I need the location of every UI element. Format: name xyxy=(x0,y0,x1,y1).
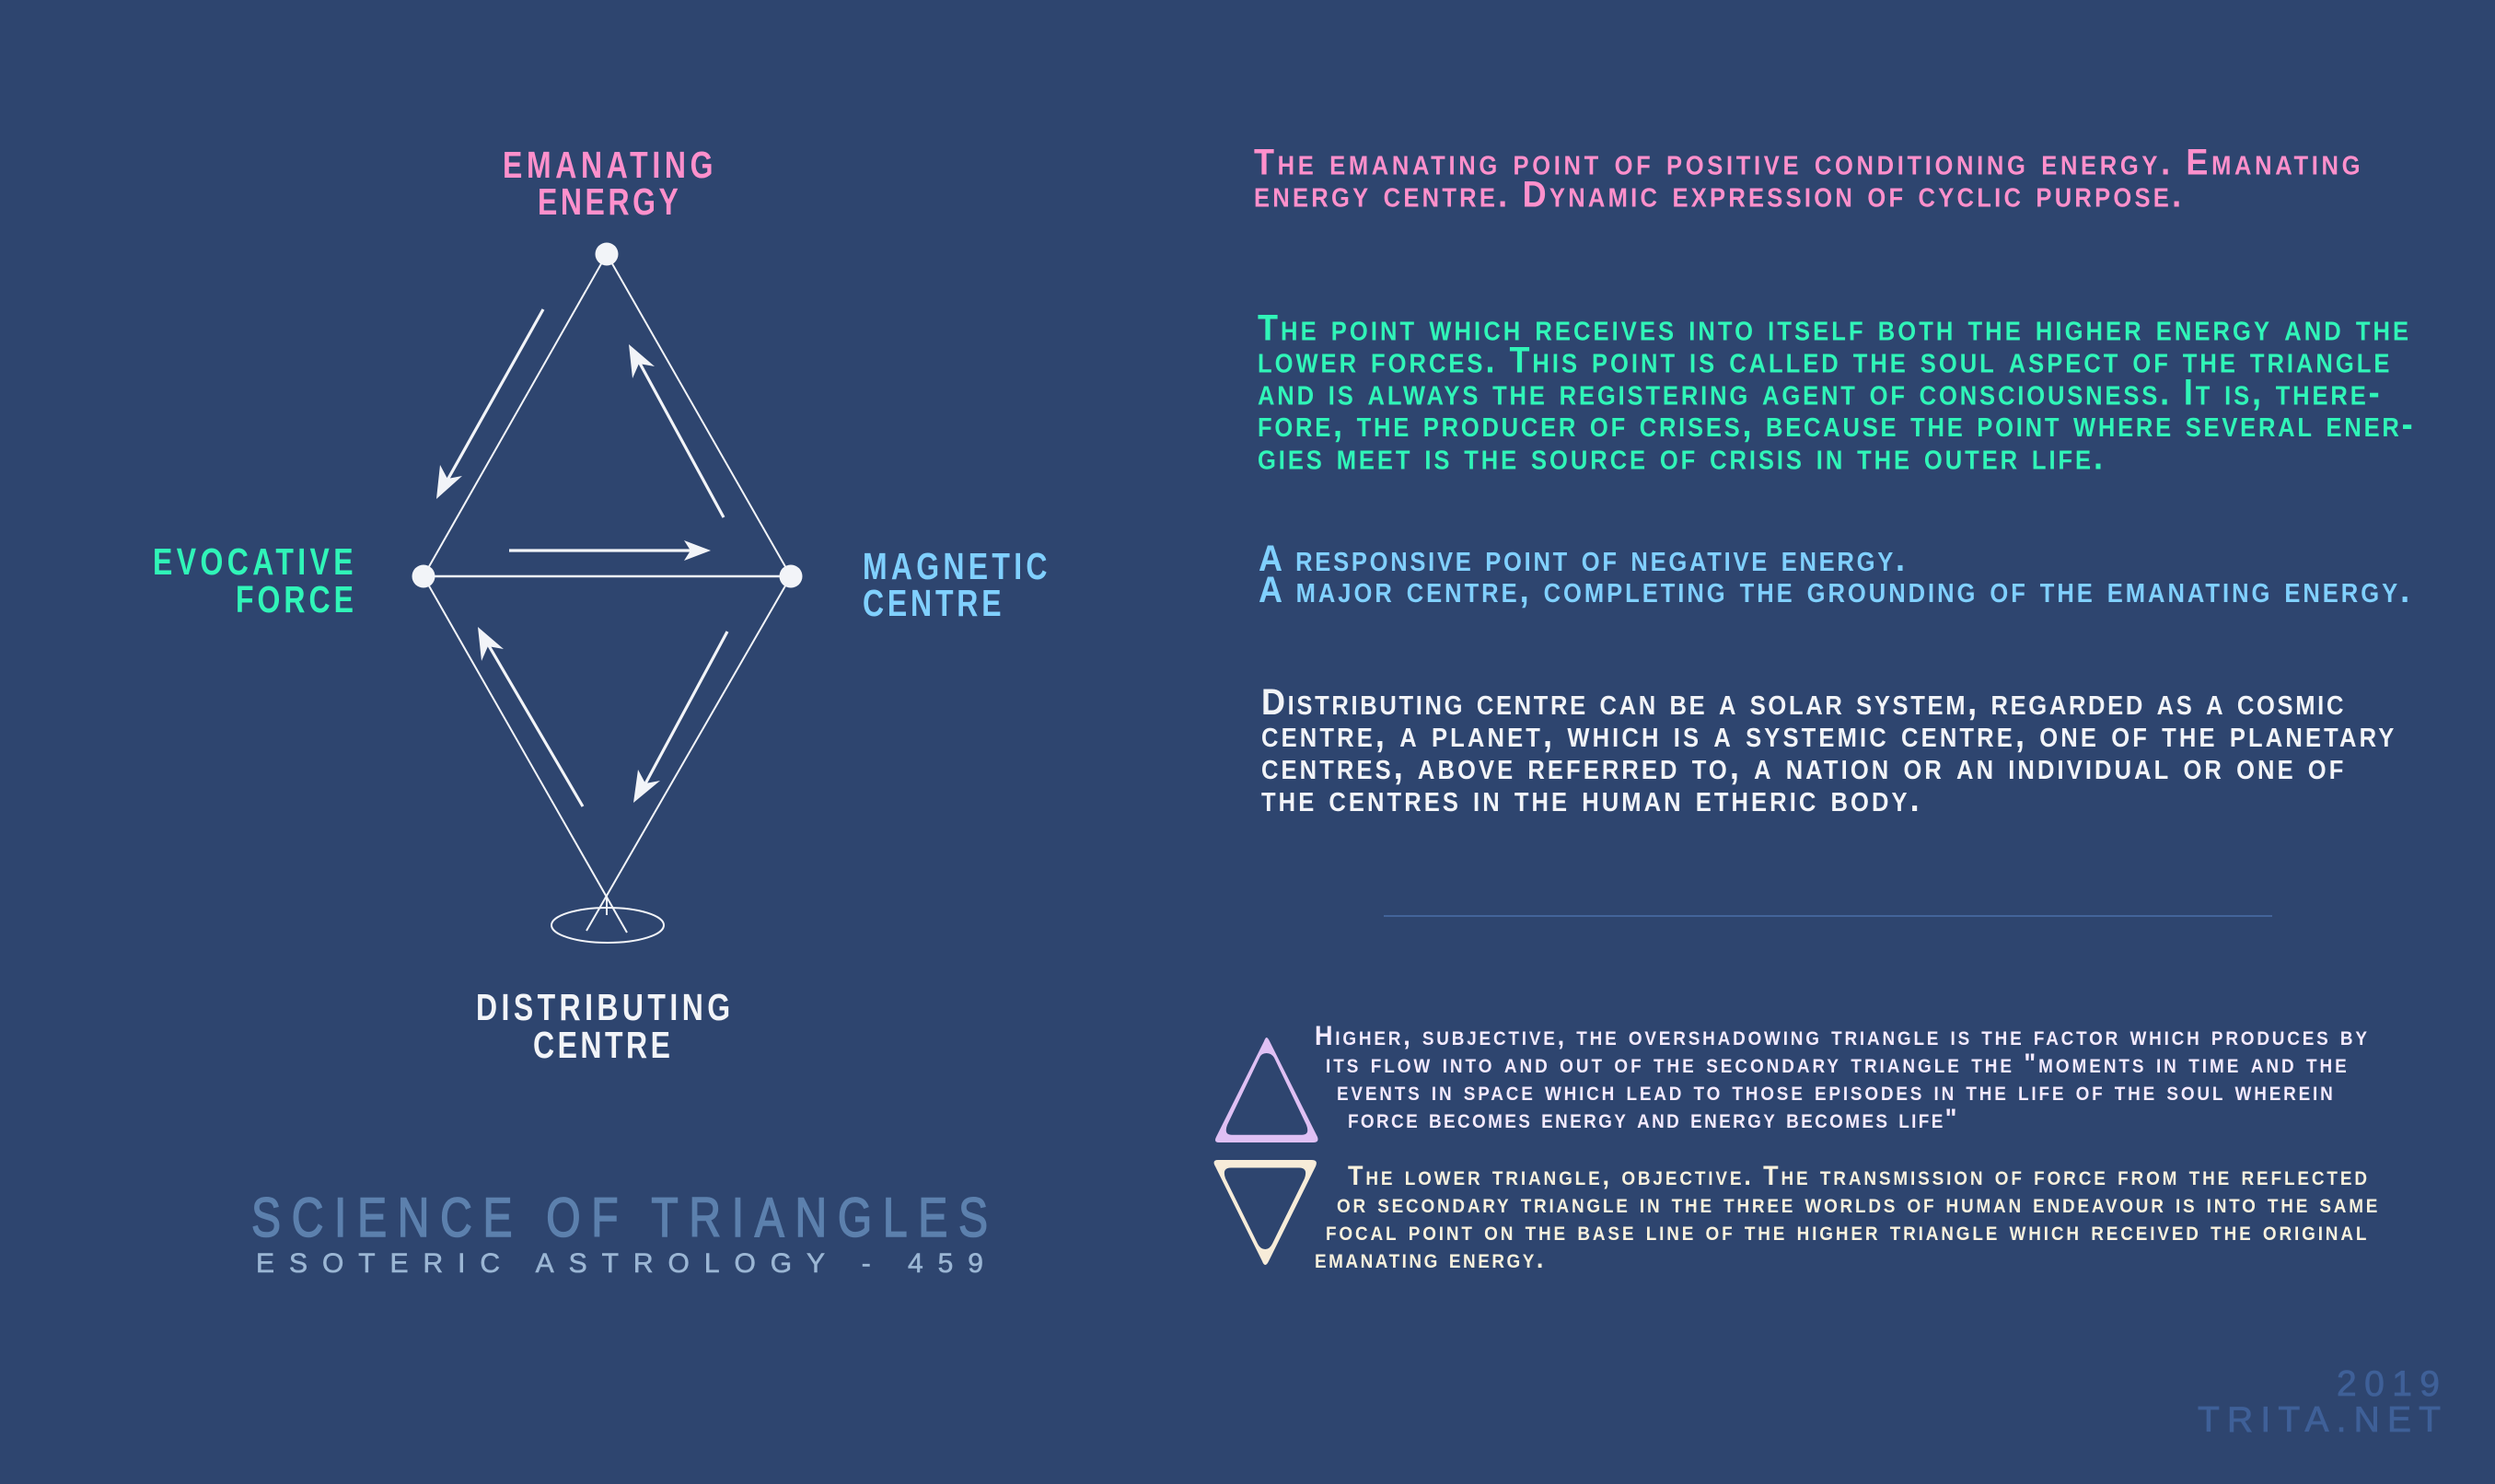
text block: higher triangle xyxy=(1315,1021,2368,1134)
icon: downward triangle xyxy=(1214,1160,1317,1265)
text block: emanating point xyxy=(1254,143,2361,215)
label: distributing centre xyxy=(476,986,730,1066)
label: distributing centre: DISTRIBUTING xyxy=(476,986,730,1028)
text block: emanating point: energy centre. Dynamic expression of cyclic purpose. xyxy=(1254,175,2181,215)
text block: distributing centre xyxy=(1261,682,2394,819)
label: distributing centre: CENTRE xyxy=(533,1024,670,1066)
label: evocative force xyxy=(153,540,354,620)
text block: responsive point: A major centre, completing the grounding of the emanating energy. xyxy=(1259,570,2409,610)
title: SCIENCE OF TRIANGLES xyxy=(251,1187,988,1248)
node: right xyxy=(779,565,803,587)
text block: lower triangle: The lower triangle, objective. The transmission of force from the reflected xyxy=(1348,1161,2367,1191)
triangle lines xyxy=(424,254,791,933)
text block: distributing centre: centre, a planet, which is a systemic centre, one of the planetary xyxy=(1261,714,2394,755)
arrow: emanating to evocative xyxy=(436,309,543,499)
text block: higher triangle: force becomes energy and energy becomes life" xyxy=(1348,1104,1957,1134)
credit: year: 2019 xyxy=(2337,1364,2440,1404)
label: emanating energy: EMANATING xyxy=(503,144,714,186)
ellipse: distributing centre base xyxy=(551,908,664,943)
arrow: distributing to evocative xyxy=(478,627,583,806)
node: top xyxy=(595,243,619,265)
label: magnetic centre: CENTRE xyxy=(863,582,1002,624)
icon: upward triangle xyxy=(1215,1038,1318,1142)
label: evocative force: FORCE xyxy=(236,578,354,620)
label: magnetic centre xyxy=(863,545,1047,624)
label: magnetic centre: MAGNETIC xyxy=(863,545,1047,587)
credit: site: TRITA.NET xyxy=(2198,1400,2441,1440)
text block: distributing centre: the centres in the human etheric body. xyxy=(1261,779,1920,819)
text block: receiving point: and is always the registering agent of consciousness. It is, there- xyxy=(1258,373,2380,413)
text block: higher triangle: events in space which lead to those episodes in the life of the soul wherein xyxy=(1337,1076,2333,1107)
text block: lower triangle: focal point on the base line of the higher triangle which received the original xyxy=(1326,1216,2366,1246)
text block: higher triangle: Higher, subjective, the overshadowing triangle is the factor which produces by xyxy=(1315,1021,2368,1051)
text block: receiving point: The point which receives into itself both the higher energy and the xyxy=(1258,308,2408,349)
label: emanating energy: ENERGY xyxy=(538,180,679,223)
text block: receiving point: fore, the producer of crises, because the point where several ener- xyxy=(1258,404,2413,445)
label: emanating energy xyxy=(503,144,714,223)
text block: lower triangle xyxy=(1315,1161,2377,1274)
text block: receiving point: lower forces. This point is called the soul aspect of the triangle xyxy=(1258,341,2389,381)
subtitle: ESOTERIC ASTROLOGY - 459 xyxy=(256,1248,983,1279)
text block: lower triangle: or secondary triangle in the three worlds of human endeavour is into the same xyxy=(1337,1188,2377,1219)
node: left xyxy=(412,565,435,587)
arrow: evocative to magnetic xyxy=(509,540,711,561)
text block: lower triangle: emanating energy. xyxy=(1315,1244,1543,1274)
label: evocative force: EVOCATIVE xyxy=(153,540,354,583)
text block: higher triangle: its flow into and out of the secondary triangle the "moments in time and the xyxy=(1326,1049,2347,1079)
arrow: magnetic to emanating xyxy=(629,344,724,517)
text block: responsive point: A responsive point of negative energy. xyxy=(1259,539,1905,579)
text block: responsive point xyxy=(1259,539,2409,610)
text block: distributing centre: centres, above referred to, a nation or an individual or one of xyxy=(1261,747,2343,787)
diagram: double triangle xyxy=(412,243,803,943)
text block: receiving point: gies meet is the source of crisis in the outer life. xyxy=(1258,437,2103,478)
text block: distributing centre: Distributing centre can be a solar system, regarded as a cosmic xyxy=(1261,682,2343,723)
text block: receiving point xyxy=(1258,308,2413,478)
arrow: magnetic to distributing xyxy=(633,632,727,803)
text block: emanating point: The emanating point of positive conditioning energy. Emanating xyxy=(1254,143,2360,183)
